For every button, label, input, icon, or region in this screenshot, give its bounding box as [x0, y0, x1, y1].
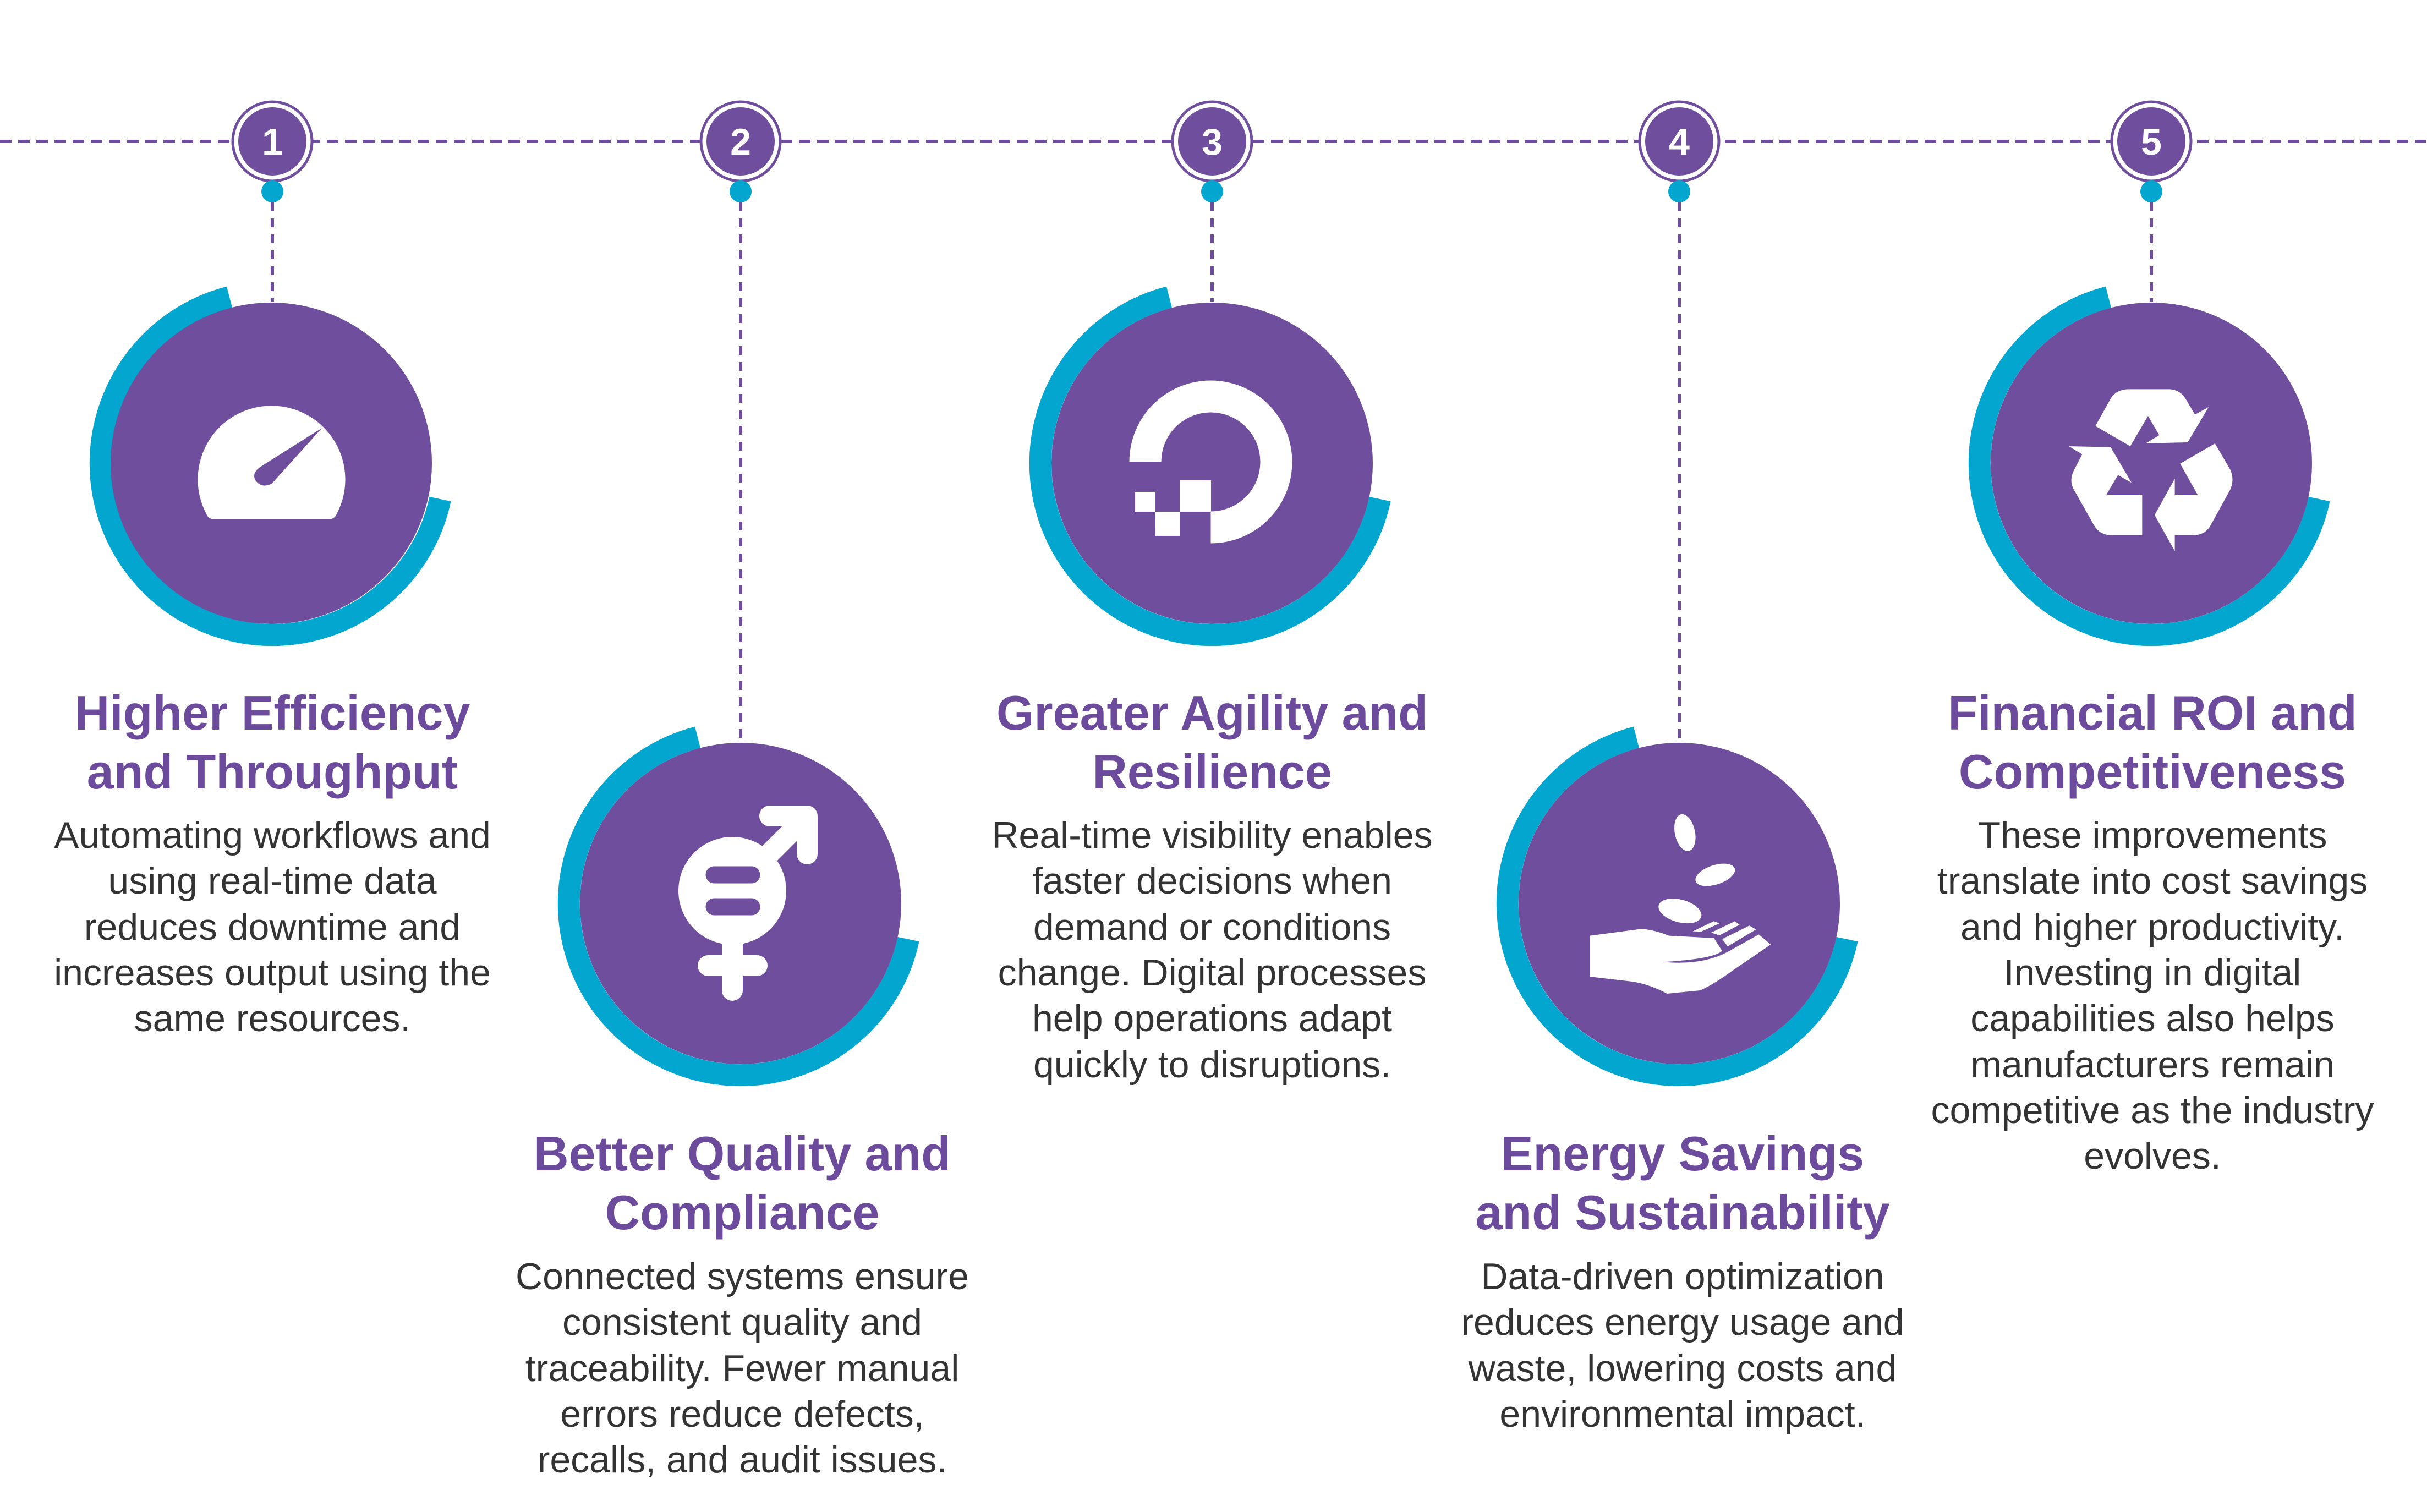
- badge 3: [1173, 102, 1252, 202]
- text: step 1: [54, 686, 491, 1039]
- badge 5: 5: [2141, 121, 2162, 163]
- text: step 2: Better Quality and: [534, 1126, 951, 1181]
- text: step 3: faster decisions when: [1032, 860, 1392, 902]
- text: step 4: and Sustainability: [1475, 1185, 1890, 1240]
- text: step 5: and higher productivity.: [1960, 906, 2344, 948]
- badge 4: [1640, 102, 1719, 202]
- text: step 4: environmental impact.: [1499, 1393, 1866, 1435]
- icon: recycle: [2069, 389, 2232, 551]
- badge 1: [233, 102, 312, 202]
- text: step 4: [1461, 1126, 1904, 1435]
- text: step 5: These improvements: [1978, 814, 2327, 856]
- circle 1: speedometer: [101, 297, 440, 635]
- text: step 4: reduces energy usage and: [1461, 1301, 1904, 1343]
- text: step 2: traceability. Fewer manual: [525, 1347, 959, 1389]
- badge 4: 4: [1669, 121, 1690, 163]
- text: step 1: same resources.: [134, 998, 410, 1039]
- icon: speedometer: [198, 406, 346, 519]
- text: step 3: quickly to disruptions.: [1033, 1044, 1391, 1086]
- badge 1: 1: [262, 121, 283, 163]
- text: step 1: and Throughput: [87, 744, 458, 799]
- text: step 2: [516, 1126, 969, 1481]
- text: step 5: Investing in digital: [2004, 952, 2301, 994]
- text: step 4: Energy Savings: [1501, 1126, 1864, 1181]
- badge 3: 3: [1202, 121, 1223, 163]
- text: step 5: capabilities also helps: [1970, 998, 2335, 1039]
- text: step 2: Connected systems ensure: [516, 1256, 969, 1297]
- text: step 2: errors reduce defects,: [560, 1393, 924, 1435]
- text: step 4: Data-driven optimization: [1481, 1256, 1884, 1297]
- text: step 3: Resilience: [1092, 744, 1332, 799]
- text: step 3: Real-time visibility enables: [991, 814, 1433, 856]
- text: step 3: help operations adapt: [1032, 998, 1392, 1039]
- circle 3: agility: [1040, 297, 1380, 635]
- text: step 5: translate into cost savings: [1937, 860, 2368, 902]
- text: step 2: Compliance: [605, 1185, 879, 1240]
- badge 2: 2: [730, 121, 751, 163]
- text: step 5: manufacturers remain: [1970, 1044, 2335, 1086]
- text: step 5: evolves.: [2084, 1135, 2221, 1177]
- text: step 5: Competitiveness: [1959, 744, 2346, 799]
- text: step 5: Financial ROI and: [1948, 686, 2357, 740]
- icon: digital ring: [1129, 381, 1292, 544]
- circle 2: equality: [569, 737, 908, 1075]
- icon: hand with coins: [1590, 812, 1771, 994]
- text: step 5: [1931, 686, 2374, 1177]
- text: step 3: Greater Agility and: [996, 686, 1428, 740]
- text: step 1: Automating workflows and: [54, 814, 491, 856]
- text: step 1: Higher Efficiency: [75, 686, 470, 740]
- text: step 2: recalls, and audit issues.: [538, 1439, 947, 1481]
- text: step 5: competitive as the industry: [1931, 1089, 2374, 1131]
- text: step 2: consistent quality and: [562, 1301, 922, 1343]
- text: step 1: increases output using the: [54, 952, 491, 994]
- circle 4: energy: [1508, 737, 1847, 1075]
- text: step 3: [991, 686, 1433, 1086]
- circle 5: ROI: [1980, 297, 2319, 635]
- badge 5: [2112, 102, 2191, 202]
- badge 2: [701, 102, 780, 202]
- text: step 3: demand or conditions: [1033, 906, 1391, 948]
- text: step 3: change. Digital processes: [998, 952, 1426, 994]
- text: step 1: reduces downtime and: [84, 906, 461, 948]
- text: step 4: waste, lowering costs and: [1468, 1347, 1897, 1389]
- icon: gender equality: [678, 816, 807, 990]
- text: step 1: using real-time data: [108, 860, 437, 902]
